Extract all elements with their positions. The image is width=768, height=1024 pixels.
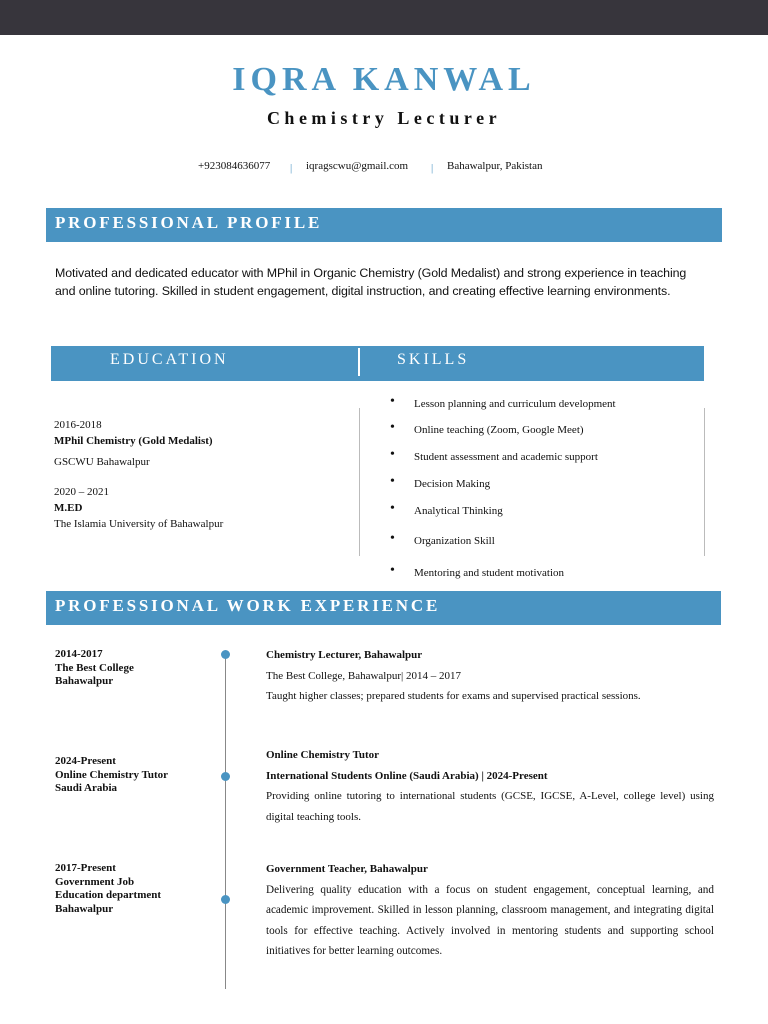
education entries: MPhil Chemistry (Gold Medalist) [54,435,213,447]
work entry 3: Delivering quality education with a focus on student engagement, conceptual learning, and academic improvement. Skilled in lesson planning, classroom management, and integrating digital tools for effective teaching. Actively involved in mentoring students and supporting school initiatives for better learning outcomes. [266,884,714,957]
header: education and skills [51,346,704,381]
work entry 2: Online Chemistry Tutor [266,749,379,761]
work entry 1: Chemistry Lecturer, Bahawalpur [266,649,422,661]
header: work experience: PROFESSIONAL WORK EXPERIENCE [55,596,440,615]
education entries: M.ED [54,502,82,514]
skills list: • [390,420,395,435]
profile text [55,266,686,298]
work entry 1 [266,649,641,702]
work entry 1: The Best College, Bahawalpur| 2014 – 2017 [266,670,461,682]
work entry 2: International Students Online (Saudi Arabia) | 2024-Present [266,770,548,782]
work left column: The Best College [55,662,134,674]
skills list: • [390,501,395,516]
text: 2024-Present [55,755,116,767]
header: professional profile: PROFESSIONAL PROFILE [55,213,322,232]
education entries: GSCWU Bahawalpur [54,456,150,468]
skills list: • [390,563,395,578]
header: education and skills: EDUCATION [110,351,229,368]
contact line: | [431,162,433,174]
work entry 3: Government Teacher, Bahawalpur [266,863,428,875]
header: work experience [46,591,721,625]
header: education and skills: SKILLS [397,351,469,368]
contact line: | [290,162,292,174]
timeline [225,652,226,989]
education entries: 2016-2018 [54,419,102,431]
skills list: Online teaching (Zoom, Google Meet) [414,424,584,436]
education entries: The Islamia University of Bahawalpur [54,518,223,530]
education entries [54,419,224,530]
skills list: • [390,447,395,462]
skills list: Student assessment and academic support [414,451,598,463]
text: Saudi Arabia [55,782,117,794]
name title: IQRA KANWAL [232,61,536,98]
contact line: iqragscwu@gmail.com [306,160,408,172]
text: Government Job [55,876,134,888]
text: 2017-Present [55,862,116,874]
work entry 2 [266,749,714,822]
text: Bahawalpur [55,902,113,914]
work entry 2: Providing online tutoring to international students (GCSE, IGCSE, A-Level, college level) using digital teaching tools. [266,790,714,822]
skills list: • [390,474,395,489]
skills list: Mentoring and student motivation [414,567,564,579]
skills list: Organization Skill [414,535,495,547]
profile text: Motivated and dedicated educator with MPhil in Organic Chemistry (Gold Medalist) and strong experience in teaching [55,266,686,280]
skills list: • [390,394,395,409]
header: professional profile [46,208,722,242]
column dividers [359,408,360,556]
education entries: 2020 – 2021 [54,486,109,498]
skills list: Lesson planning and curriculum development [414,398,616,410]
contact line [198,160,542,174]
work left column [55,648,134,687]
contact line: +923084636077 [198,160,270,172]
skills list: Decision Making [414,478,490,490]
work entry 1: Taught higher classes; prepared students for exams and supervised practical sessions. [266,690,641,702]
top dark band [0,0,768,35]
subtitle: Chemistry Lecturer [267,108,501,128]
text: Education department [55,889,161,901]
contact line: Bahawalpur, Pakistan [447,160,542,172]
skills list: Analytical Thinking [414,505,503,517]
work left column: Bahawalpur [55,675,113,687]
profile text: and online tutoring. Skilled in student engagement, digital instruction, and creating effective learning environments. [55,284,670,298]
skills list [390,394,616,579]
text: Online Chemistry Tutor [55,768,168,780]
work left column: 2014-2017 [55,648,103,660]
skills list: • [390,531,395,546]
